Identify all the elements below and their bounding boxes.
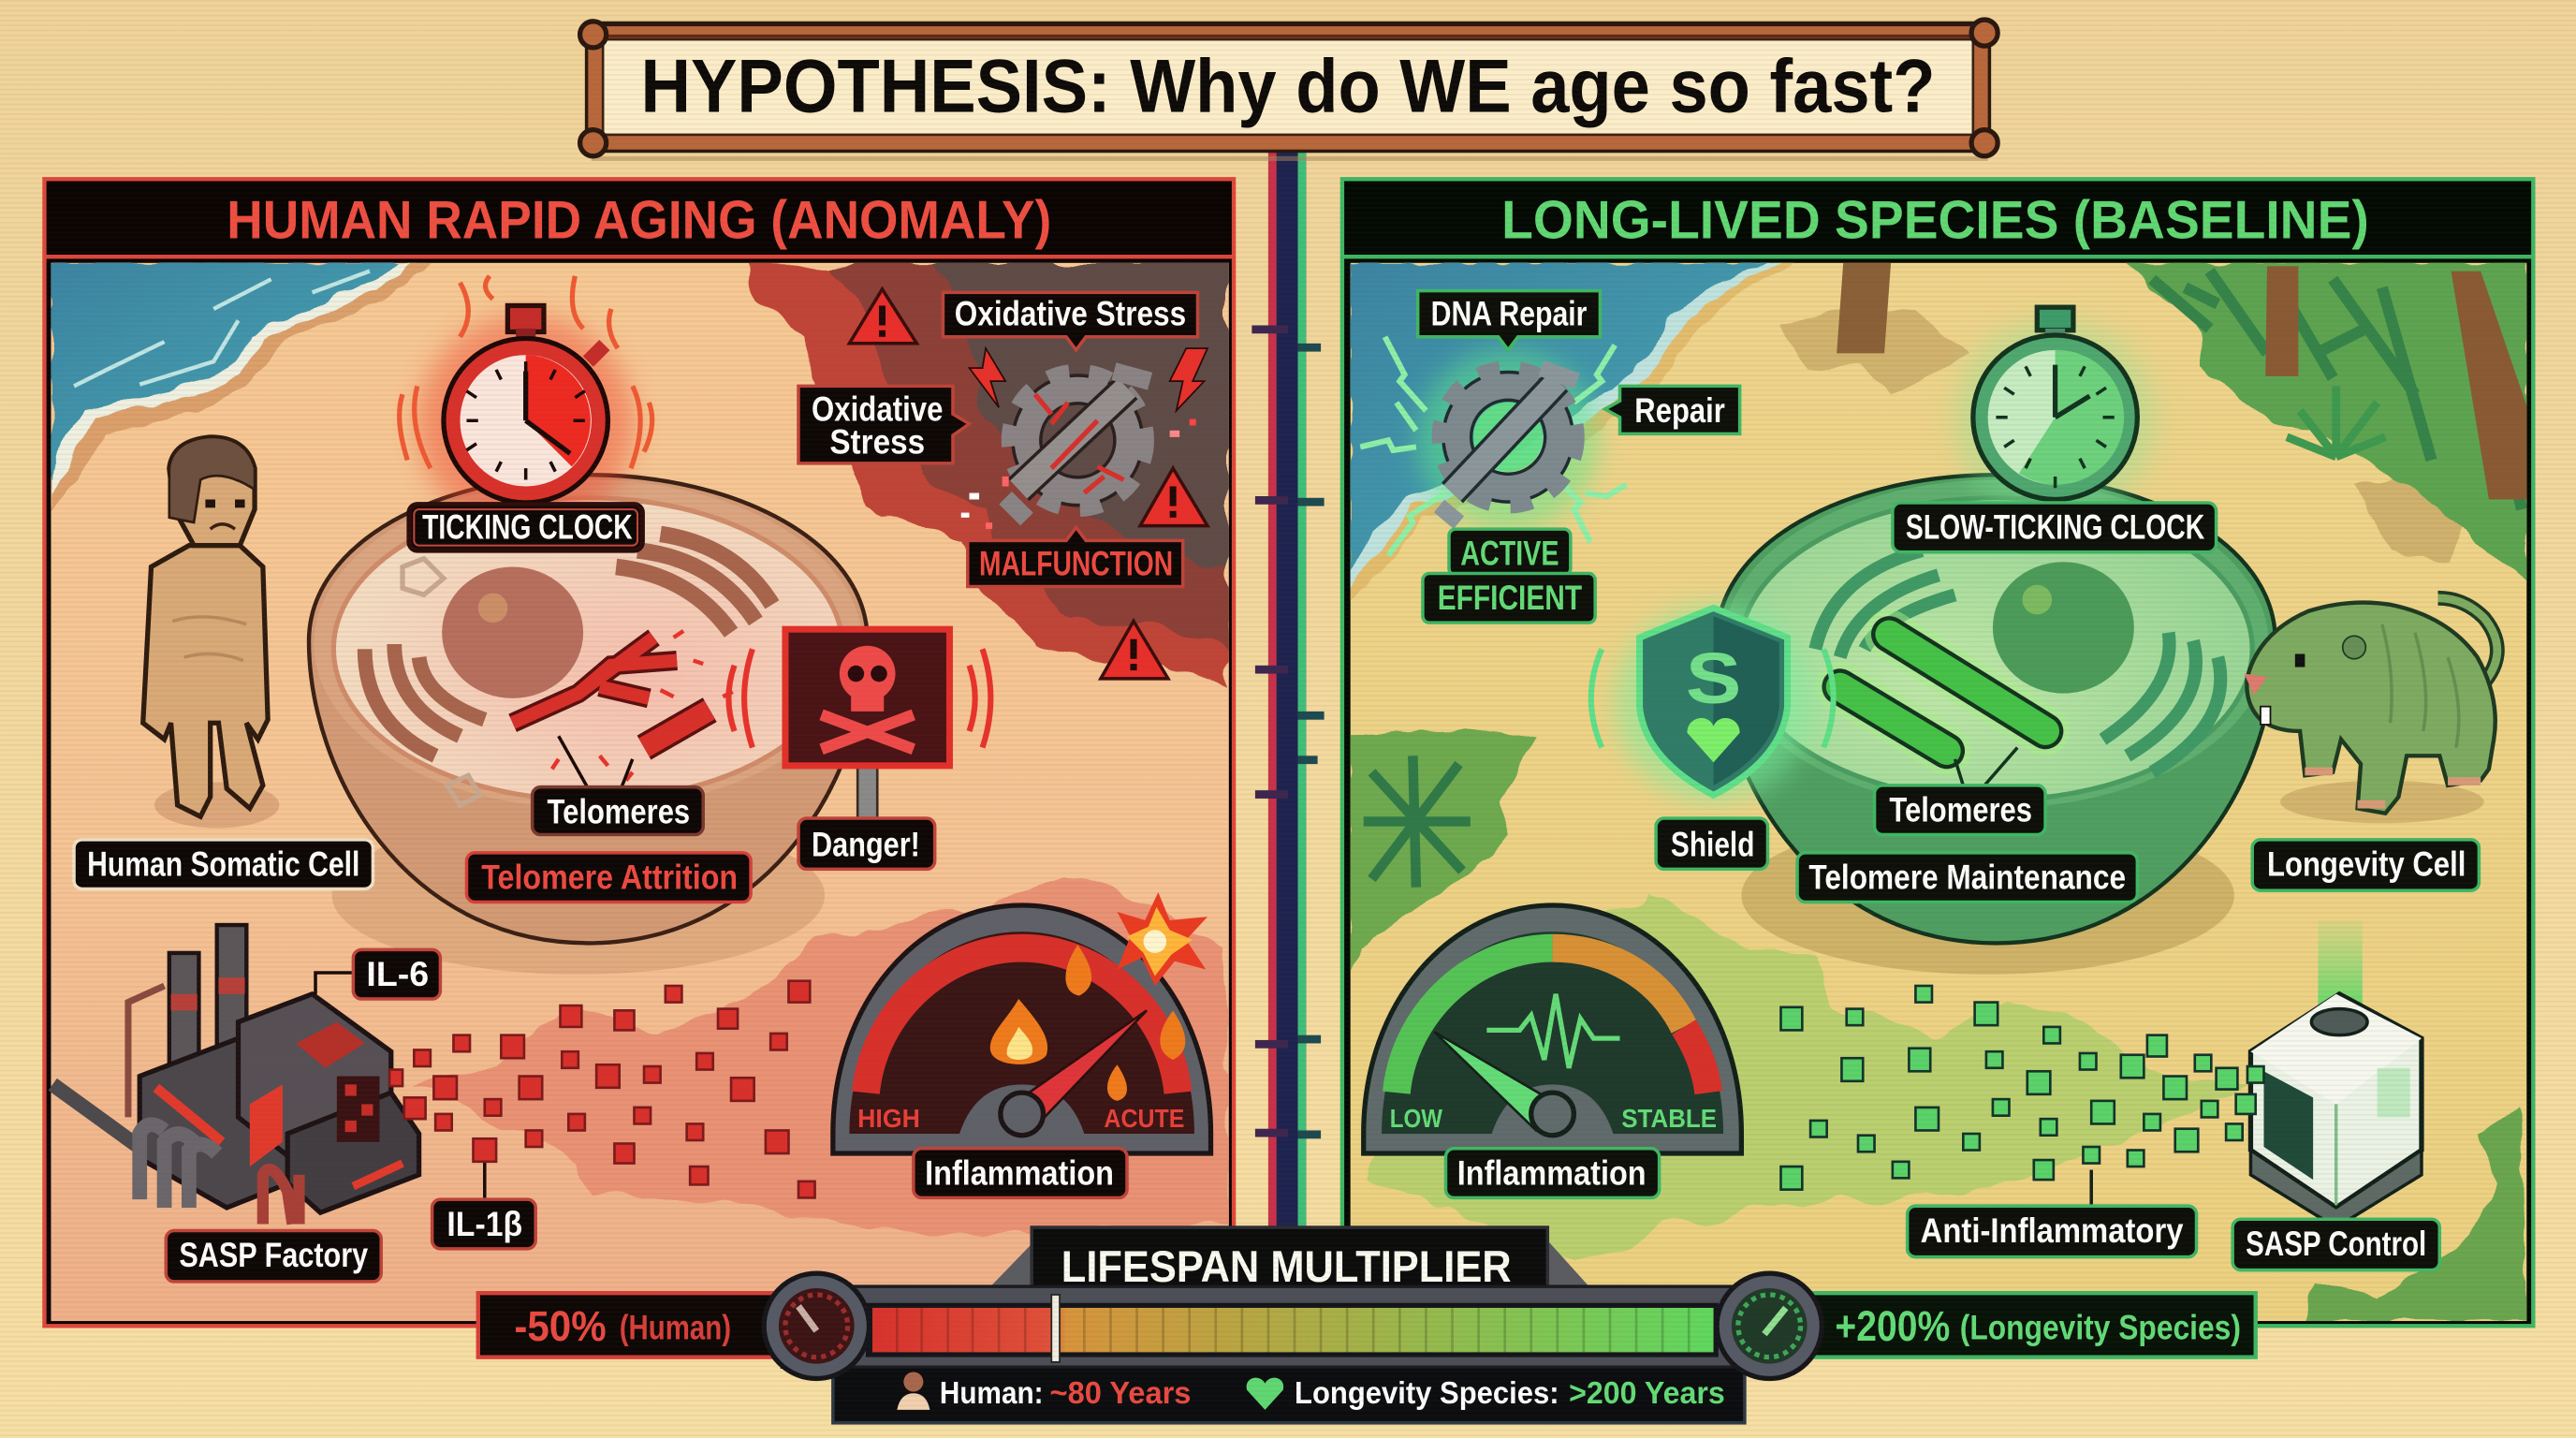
human figure: [143, 437, 279, 829]
left percent pill: (Human): [620, 1308, 731, 1346]
label: repair: Repair: [1634, 391, 1725, 430]
warning triangles: [849, 289, 1208, 679]
progress bar: [782, 1286, 1793, 1367]
label: longevity cell: Longevity Cell: [2267, 844, 2466, 883]
label: telomere maintenance: [1797, 853, 2137, 902]
left scene sand: [51, 263, 1229, 1321]
pulse line: [1486, 994, 1620, 1068]
mitochondria: [616, 534, 772, 633]
label: human somatic cell: [74, 840, 373, 888]
left dial: [764, 1273, 869, 1378]
label: telomere maintenance: Telomere Maintenance: [1808, 858, 2126, 896]
label: SASP control: SASP Control: [2246, 1225, 2426, 1263]
flames: [990, 999, 1047, 1064]
danger sign: [728, 629, 990, 820]
gear and wrench: DNA repair: [1360, 337, 1627, 555]
label: ticking clock: [409, 505, 642, 550]
title text: HYPOTHESIS: Why do WE age so fast?: [641, 44, 1935, 128]
needle right: [1434, 1032, 1560, 1130]
multiplier heading: [986, 1227, 1593, 1297]
label: shield: [1656, 818, 1767, 869]
left panel heading: HUMAN RAPID AGING (ANOMALY): [227, 190, 1051, 250]
label: anti-inflammatory: [1908, 1170, 2197, 1257]
label: danger: Danger!: [812, 825, 920, 863]
damaged telomeres: [513, 638, 677, 723]
label: ticking clock: TICKING CLOCK: [422, 508, 633, 547]
nucleus: [442, 566, 583, 698]
SASP control device: [2250, 920, 2422, 1227]
label: oxidative stress top: [943, 292, 1197, 350]
panel: human rapid aging: [44, 179, 1234, 1326]
label: oxidative stress side: Stress: [829, 422, 925, 461]
bottom years strip: >200 Years: [1569, 1376, 1725, 1411]
naked mole rat: [2244, 598, 2497, 823]
label: SASP control: [2232, 1219, 2439, 1270]
left percent pill: -50%: [514, 1302, 607, 1350]
right anti-inflammatory cloud: [1370, 894, 2249, 1260]
icon: human: [897, 1372, 929, 1410]
label: human somatic cell: Human Somatic Cell: [87, 844, 359, 883]
label: telomeres left: Telomeres: [547, 792, 690, 830]
gauge: low inflammation: STABLE: [1621, 1104, 1717, 1133]
right dial: [1717, 1273, 1822, 1378]
bottom years strip: ~80 Years: [1050, 1376, 1191, 1411]
palm and foliage: [1349, 263, 2528, 1321]
gauge: high inflammation: ACUTE: [1104, 1104, 1184, 1133]
organelles: [402, 559, 480, 805]
bottom years strip: Human:: [940, 1376, 1044, 1411]
SASP factory: [52, 925, 419, 1224]
scale words: LOW: [1390, 1104, 1442, 1133]
label: IL-6: IL-6: [366, 955, 429, 993]
right percent pill: [1808, 1293, 2256, 1357]
organelles: [1815, 550, 1955, 657]
explosion: [1117, 892, 1208, 986]
gauge: low inflammation: [1364, 905, 1741, 1153]
longevity cell: [1717, 475, 2276, 975]
shield: S: [1686, 638, 1741, 719]
needle: [1005, 1010, 1147, 1127]
lifespan multiplier: [478, 1227, 2256, 1423]
label: repair: [1605, 386, 1740, 433]
label: DNA repair: DNA Repair: [1431, 294, 1587, 332]
oxidative stress cloud: [742, 263, 1229, 687]
label: shield: Shield: [1671, 825, 1754, 863]
label: telomeres left: [533, 787, 703, 835]
label: active efficient: ACTIVE: [1460, 535, 1559, 573]
label: malfunction: [968, 527, 1183, 587]
label: danger: [798, 818, 935, 869]
label: oxidative stress top: Oxidative Stress: [955, 294, 1186, 332]
label: oxidative stress side: [798, 386, 970, 463]
label: longevity cell: [2252, 840, 2479, 890]
skull and crossbones: [822, 646, 914, 749]
anti-inflammatory particles: [1781, 986, 2263, 1190]
label: malfunction: MALFUNCTION: [979, 544, 1173, 582]
icon: heart: [1247, 1378, 1283, 1410]
right panel heading: LONG-LIVED SPECIES (BASELINE): [1501, 190, 2369, 250]
right percent pill: (Longevity Species): [1960, 1308, 2241, 1346]
multiplier heading: LIFESPAN MULTIPLIER: [1061, 1242, 1512, 1292]
label: IL-1 beta: IL-1β: [446, 1205, 522, 1243]
label: anti-inflammatory: Anti-Inflammatory: [1921, 1211, 2184, 1250]
human cell: [309, 475, 868, 975]
stopwatch: ticking clock: [400, 276, 652, 533]
panel: long-lived species: [1342, 179, 2533, 1326]
left sea: [51, 263, 431, 513]
inflammation cloud: [411, 875, 1229, 1238]
gauge: high inflammation: [833, 892, 1211, 1153]
left percent pill: [478, 1293, 782, 1357]
bottom years strip: Longevity Species:: [1295, 1376, 1559, 1411]
shield: [1591, 605, 1834, 801]
label: oxidative stress side: Oxidative: [812, 389, 943, 428]
title banner: [580, 20, 1998, 161]
label: IL-6: [315, 949, 440, 999]
label: active efficient: [1423, 529, 1595, 623]
right sea: [1351, 263, 1797, 605]
healthy telomeres: [1840, 634, 2045, 751]
gauge scale words: HIGH: [857, 1104, 920, 1133]
label: slow ticking clock: [1893, 503, 2217, 552]
label: inflammation right: Inflammation: [1457, 1153, 1647, 1192]
label: telomere attrition: [466, 853, 751, 902]
nucleus right: [1993, 562, 2134, 694]
label: active efficient: EFFICIENT: [1438, 579, 1583, 617]
label: inflammation left: Inflammation: [925, 1153, 1114, 1192]
bottom years strip: [833, 1357, 1745, 1423]
stopwatch: slow ticking: [1954, 307, 2157, 522]
label: DNA repair: [1418, 291, 1600, 350]
label: telomeres right: Telomeres: [1889, 791, 2032, 829]
right scene sand: [1351, 263, 2526, 1321]
right percent pill: +200%: [1835, 1302, 1950, 1350]
label: telomere attrition: Telomere Attrition: [481, 858, 738, 896]
label: SASP factory: [166, 1231, 381, 1282]
label: IL-1 beta: [432, 1160, 535, 1249]
label: slow ticking clock: SLOW-TICKING CLOCK: [1906, 508, 2205, 547]
center divider: [1251, 151, 1325, 1252]
broken gear and wrench: [961, 348, 1208, 529]
cytokine particles left: [389, 981, 815, 1197]
label: telomeres right: [1875, 785, 2045, 835]
label: SASP factory: SASP Factory: [179, 1236, 369, 1274]
